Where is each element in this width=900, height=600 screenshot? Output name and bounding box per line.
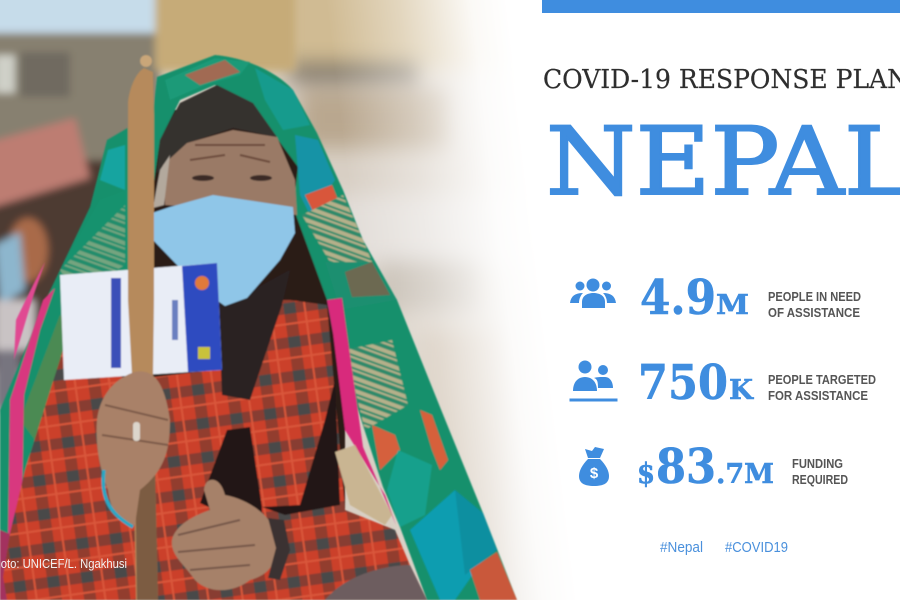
shawl fringe xyxy=(335,445,392,525)
blurred photo background xyxy=(0,0,534,600)
pink shawl lining xyxy=(0,262,396,600)
stat: people targeted xyxy=(570,355,876,411)
label: OF ASSISTANCE xyxy=(768,305,860,320)
face xyxy=(163,130,297,215)
wooden staff xyxy=(128,55,158,600)
surgical face mask xyxy=(152,195,295,306)
title: NEPAL xyxy=(546,108,900,217)
label xyxy=(792,456,848,487)
grey knee xyxy=(325,565,427,600)
value 4.9M: 4.9 xyxy=(640,270,716,326)
stat: funding required xyxy=(579,439,848,495)
hashtags: #Nepal xyxy=(660,539,703,556)
icon: money bag: $ xyxy=(590,465,599,482)
value $83.7M: $ xyxy=(637,457,655,490)
value 750K: K xyxy=(729,375,755,406)
eyes xyxy=(190,145,272,181)
label xyxy=(768,289,861,320)
hashtags xyxy=(660,539,788,556)
hand gripping staff xyxy=(97,371,170,525)
label: FUNDING xyxy=(792,456,843,471)
value 4.9M: M xyxy=(716,290,749,321)
top accent bar xyxy=(542,0,900,13)
shawl outer green xyxy=(0,55,517,600)
label: PEOPLE IN NEED xyxy=(768,289,861,304)
value 750K: 750 xyxy=(638,355,728,411)
photo: woman holding card xyxy=(0,0,534,600)
icon: two people on a line xyxy=(570,360,618,402)
label xyxy=(768,372,876,403)
dark sleeve cuff xyxy=(268,518,290,580)
icon: money bag xyxy=(579,447,609,486)
woman figure xyxy=(0,55,517,600)
shawl pattern patches xyxy=(20,58,517,600)
lower resting hand xyxy=(172,480,278,590)
hashtags: #COVID19 xyxy=(725,539,788,556)
value $83.7M xyxy=(637,439,774,495)
icon: group of people xyxy=(570,278,616,308)
label: REQUIRED xyxy=(792,472,848,487)
label: FOR ASSISTANCE xyxy=(768,388,868,403)
value $83.7M: .7M xyxy=(716,459,774,490)
stat: people in need xyxy=(570,270,861,326)
label: PEOPLE TARGETED xyxy=(768,372,876,387)
grey hair xyxy=(153,155,170,208)
head wrap xyxy=(157,85,277,173)
plaid shirt xyxy=(3,300,410,600)
dark underlay xyxy=(0,110,345,600)
dark shirt opening xyxy=(200,380,340,520)
value $83.7M: 83 xyxy=(656,439,716,495)
dark neck scarf xyxy=(218,270,290,400)
registration card xyxy=(60,263,222,380)
blue bracelet xyxy=(103,470,133,527)
